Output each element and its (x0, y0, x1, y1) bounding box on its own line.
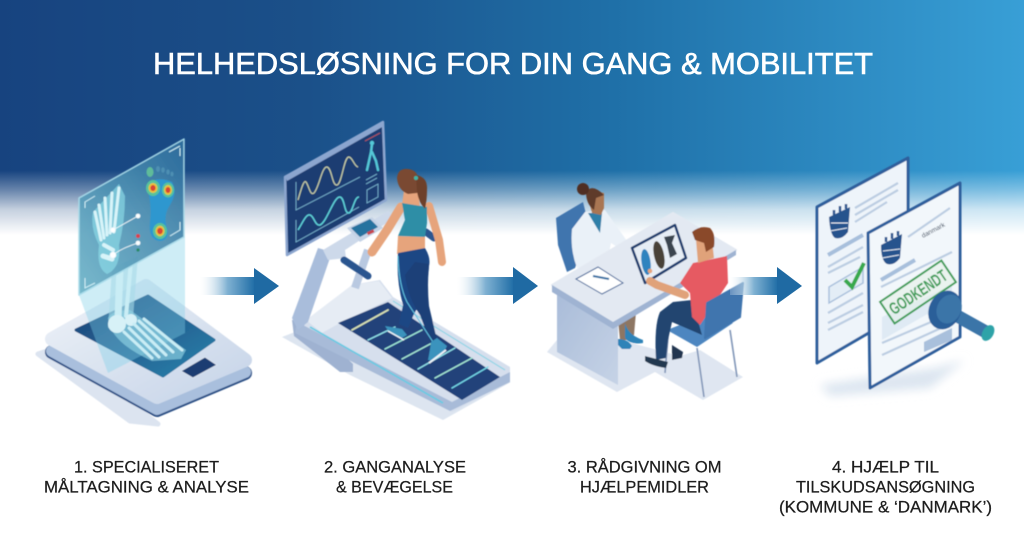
check mark (845, 263, 864, 287)
document shadow (820, 360, 965, 396)
municipal crest (829, 204, 850, 238)
floor shadow (547, 340, 743, 400)
doctor legs and heels (618, 312, 643, 349)
desk (552, 213, 736, 385)
arrow 1 (200, 268, 279, 304)
godkendt stamp mark: GODKENDT (886, 266, 951, 319)
arrow 3 (730, 267, 802, 304)
godkendt stamp mark (880, 261, 956, 323)
document 2 (868, 183, 960, 388)
pressure heat map (146, 166, 175, 241)
label 1: 1. SPECIALISERET (74, 458, 219, 476)
label 2: 2. GANGANALYSE (324, 458, 466, 476)
woman walking (372, 169, 447, 363)
holographic panel (79, 139, 184, 295)
treadmill shadow (282, 330, 511, 420)
illustration: foot scanner (38, 139, 245, 424)
doctor chair (556, 202, 590, 272)
scanner shadow (38, 350, 158, 424)
x-ray leg and foot (108, 256, 186, 361)
patient (645, 227, 728, 368)
arrow 2 (457, 267, 538, 304)
treadmill base (292, 280, 510, 412)
document 1 (817, 158, 908, 363)
rubber stamp (922, 285, 997, 343)
scanner base (52, 286, 245, 410)
label 3 (568, 458, 722, 496)
danmark text: danmark (921, 221, 947, 240)
tablet showing insoles (632, 225, 686, 283)
label 2: & BEVÆGELSE (336, 478, 453, 496)
label 1 (44, 458, 249, 496)
illustration: treadmill gait analysis (282, 121, 511, 420)
wall monitor with gait charts (285, 121, 386, 255)
patient chair seat and legs (665, 315, 737, 397)
x-ray foot on panel (92, 184, 140, 274)
label 4: 4. HJÆLP TIL (832, 458, 939, 476)
label 4: TILSKUDSANSØGNING (796, 478, 975, 496)
label 3: HJÆLPEMIDLER (580, 478, 709, 496)
patient chair back (705, 283, 743, 338)
municipal crest (881, 231, 902, 264)
label 1: MÅLTAGNING & ANALYSE (44, 478, 249, 496)
hologram light beam (79, 237, 185, 373)
treadmill frame and console (292, 211, 434, 330)
label 4 (779, 458, 992, 516)
label 2 (324, 458, 466, 496)
label 4: (KOMMUNE & ‘DANMARK’) (779, 498, 992, 516)
doctor (572, 183, 634, 268)
illustration: consultation at desk (547, 183, 743, 400)
title: HELHEDSLØSNING FOR DIN GANG & MOBILITET (153, 46, 873, 81)
illustration: documents with approval stamp (817, 158, 997, 396)
label 3: 3. RÅDGIVNING OM (568, 458, 722, 476)
